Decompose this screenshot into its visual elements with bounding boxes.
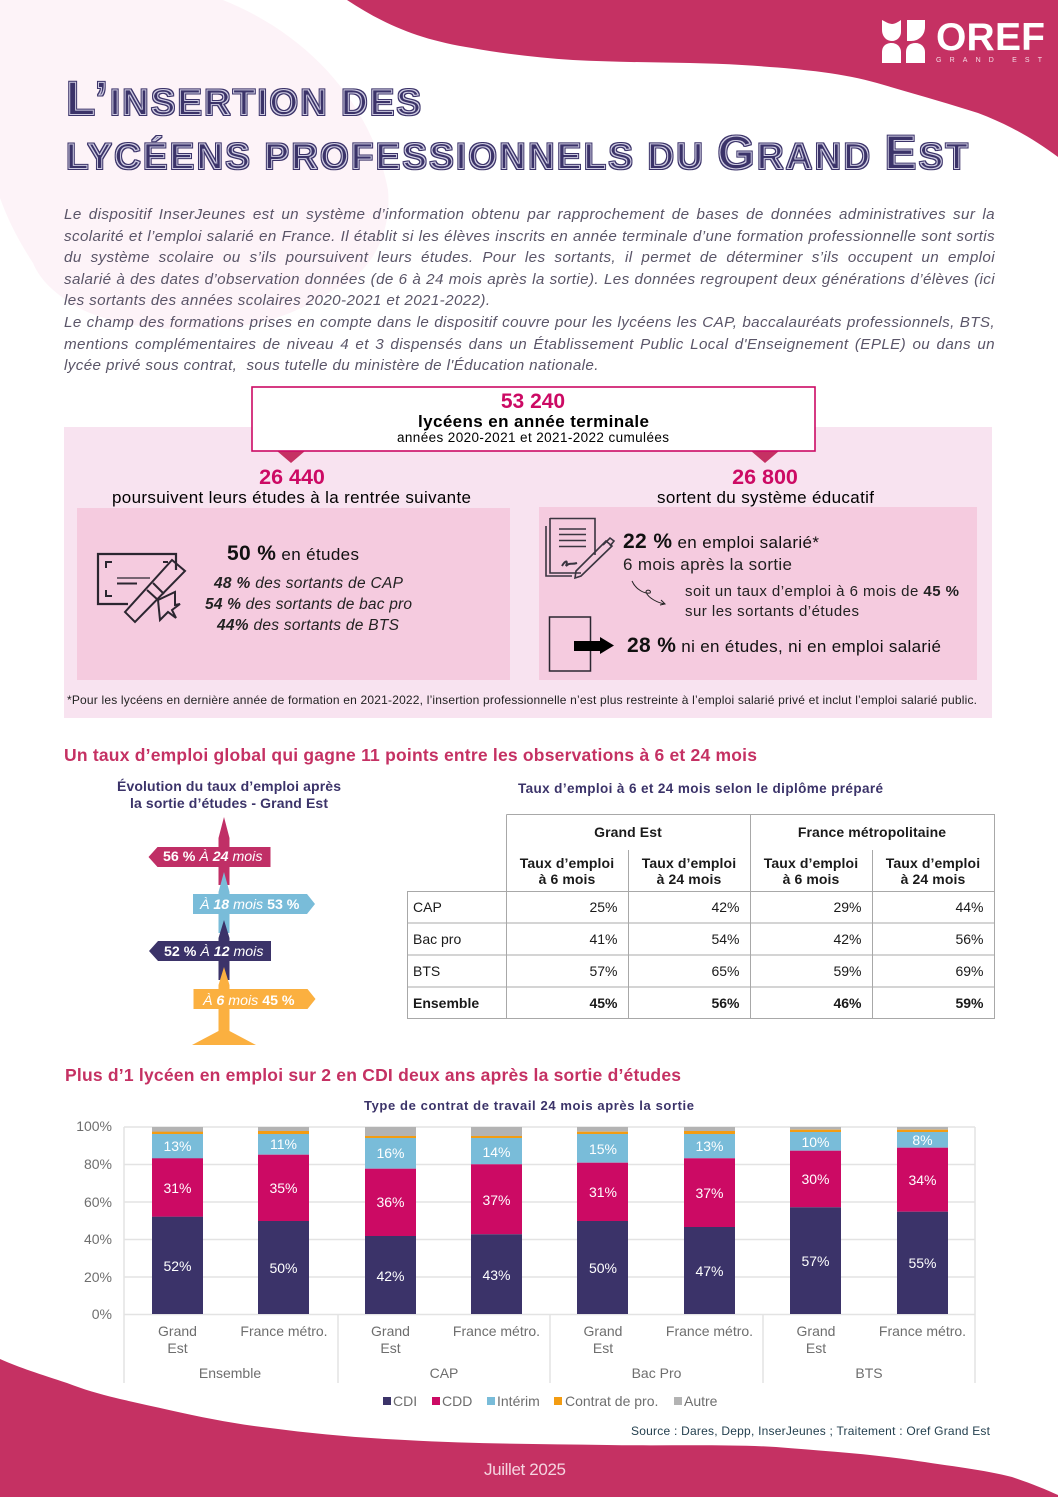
title: LYCÉENS PROFESSIONNELS DU GRAND EST: [66, 127, 968, 180]
bars: BTS Grand Est: [790, 1127, 841, 1314]
y axis labels: 100%: [76, 1118, 112, 1134]
table header: Taux d’emploi: [764, 855, 858, 871]
source note: Source : Dares, Depp, InserJeunes ; Traitement : Oref Grand Est: [631, 1424, 991, 1438]
table header: à 6 mois: [783, 871, 840, 887]
bars: CAP France: 14%: [482, 1144, 511, 1160]
bars: CAP Grand Est: 42%: [376, 1268, 405, 1284]
panel: population breakdown: [64, 387, 992, 718]
sign: 18 months: [193, 872, 315, 933]
x axis labels: Est: [593, 1340, 613, 1356]
panel: leavers: [539, 507, 977, 680]
footnote: *Pour les lycéens en dernière année de formation en 2021-2022, l’insertion professionnelle n’est plus restreinte à l’emploi salarié privé et inclut l’emploi salarié public.: [67, 693, 977, 707]
bars: BTS France: 55%: [908, 1255, 937, 1271]
bars: CAP Grand Est: 36%: [376, 1194, 405, 1210]
table header: à 6 mois: [539, 871, 596, 887]
intro text block: Le champ des formations prises en compte dans le dispositif couvre pour les lycéens les CAP, baccalauréats professionnels, BTS,: [64, 314, 995, 331]
x axis labels: [158, 1323, 966, 1381]
panel: studies: [77, 508, 510, 680]
table header: Taux d’emploi: [520, 855, 614, 871]
y axis labels: 40%: [84, 1231, 112, 1247]
table rows: BTS: [413, 963, 440, 979]
text: six months after: 6 mois après la sortie: [623, 555, 792, 574]
table rows: 44%: [955, 899, 984, 915]
x axis labels: BTS: [855, 1365, 883, 1381]
table rows: 42%: [833, 931, 862, 947]
intro text block: Le dispositif InserJeunes est un système d’information obtenu par rapprochement de bases de données administratives sur la: [64, 206, 995, 223]
y axis labels: 60%: [84, 1194, 112, 1210]
icon: diploma: [98, 554, 185, 622]
bars: Bac Pro Grand Est: [577, 1127, 628, 1314]
table header: [520, 824, 980, 887]
sign: 24 months: 56 % À 24 mois: [163, 848, 262, 865]
bars: CAP France: 43%: [482, 1267, 511, 1283]
sign: 6 months: [192, 967, 316, 1045]
table rows: 69%: [955, 963, 984, 979]
table rows: 45%: [589, 995, 618, 1011]
bars: Bac Pro Grand Est: 15%: [589, 1141, 617, 1157]
y axis labels: [76, 1118, 112, 1322]
icon: logo petals: [882, 20, 925, 63]
table header: à 24 mois: [901, 871, 965, 887]
connector triangle right: [751, 451, 779, 463]
sign: 12 months: [149, 920, 271, 980]
legend: Intérim: [497, 1393, 540, 1409]
stat: 50 % in studies: 50 % en études: [227, 542, 359, 565]
table rows: 46%: [833, 995, 862, 1011]
intro text block: les sortants des années scolaires 2020-2021 et 2021-2022).: [64, 292, 490, 309]
intro text block: mentions complémentaires de niveau 4 et 3 dispensés dans un Établissement Public Local d'Enseignement (EPLE) ou dans un: [64, 336, 995, 353]
chart gridlines and axes: [124, 1127, 975, 1383]
x axis labels: Est: [806, 1340, 826, 1356]
left heading: continuing studies: poursuivent leurs études à la rentrée suivante: [112, 488, 471, 507]
stat: 22 % employed: 22 % en emploi salarié*: [623, 530, 819, 553]
table header: France métropolitaine: [798, 824, 946, 840]
signpost chart: employment rate over time: [117, 778, 341, 1045]
text: employment rate note: sur les sortants d’études: [685, 603, 859, 620]
bars: Ensemble France: 50%: [269, 1260, 298, 1276]
table rows: 59%: [833, 963, 862, 979]
bars: Ensemble Grand Est: 13%: [163, 1138, 192, 1154]
table rows: Bac pro: [413, 931, 461, 947]
legend: Autre: [684, 1393, 718, 1409]
background shape: bottom magenta wave: [0, 1359, 1058, 1497]
bars: Bac Pro France: 37%: [695, 1185, 724, 1201]
x axis labels: Grand: [371, 1323, 410, 1339]
icon: exit arrow: [550, 617, 614, 671]
table rows: 56%: [955, 931, 984, 947]
total box: 53 240: [501, 390, 565, 413]
x axis labels: Est: [167, 1340, 188, 1356]
text: employment rate note: soit un taux d’emploi à 6 mois de 45 %: [685, 583, 959, 600]
intro text block: salarié à des dates d’observation données (de 6 à 24 mois après la sortie). Les données regroupent deux générations d’élèves (ici: [64, 271, 995, 288]
chart title: [117, 778, 341, 811]
bars: Ensemble France: 35%: [269, 1180, 298, 1196]
x axis labels: Bac Pro: [632, 1365, 682, 1381]
stat: by diploma: 54 % des sortants de bac pro: [205, 596, 412, 613]
bars: CAP Grand Est: [365, 1127, 416, 1314]
intro text block: [64, 206, 995, 374]
connector triangle left: [277, 451, 305, 463]
sign: 24 months: [148, 817, 270, 885]
background blob: pale pink top left: [0, 0, 388, 329]
stacked bar chart: contract types: [76, 1098, 975, 1409]
table rows: 29%: [833, 899, 862, 915]
bars: BTS France: [897, 1127, 948, 1314]
bars: CAP France: [471, 1127, 522, 1314]
bars: Bac Pro France: [684, 1127, 735, 1314]
logo wordmark: OREF: [936, 16, 1045, 59]
table rows: [413, 899, 984, 1011]
legend: CDD: [442, 1393, 472, 1409]
stat: 28 % neither: 28 % ni en études, ni en emploi salarié: [627, 634, 941, 657]
icon: curly arrow: [632, 581, 665, 605]
x axis labels: France métro.: [879, 1323, 966, 1339]
y axis labels: 80%: [84, 1156, 112, 1172]
title: L’INSERTION DES: [66, 73, 421, 126]
bars: Bac Pro France: 13%: [695, 1138, 724, 1154]
x axis labels: Grand: [584, 1323, 622, 1339]
table header: Grand Est: [594, 824, 662, 840]
total box: lycéens en année terminale: [418, 412, 649, 431]
logo tagline: GRAND EST: [936, 57, 1043, 64]
left heading: continuing studies: [112, 465, 471, 507]
bars: Bac Pro France: 47%: [695, 1263, 724, 1279]
table rows: 54%: [711, 931, 740, 947]
table rows: Ensemble: [413, 995, 479, 1011]
panel background: [64, 427, 992, 718]
x axis labels: Ensemble: [199, 1365, 261, 1381]
right heading: leaving education: 26 800: [732, 465, 798, 489]
chart title: Évolution du taux d’emploi après: [117, 778, 341, 794]
heading: section contracts: Plus d’1 lycéen en emploi sur 2 en CDI deux ans après la sortie d’études: [65, 1065, 681, 1085]
table header: Taux d’emploi: [886, 855, 980, 871]
x axis labels: France métro.: [666, 1323, 753, 1339]
bars: Ensemble Grand Est: [152, 1127, 203, 1314]
y axis labels: 20%: [84, 1269, 112, 1285]
table rows: 41%: [589, 931, 618, 947]
table title: Taux d’emploi à 6 et 24 mois selon le diplôme préparé: [518, 781, 883, 796]
x axis labels: France métro.: [240, 1323, 328, 1339]
x axis labels: Grand: [158, 1323, 197, 1339]
bars: Ensemble France: 11%: [270, 1136, 297, 1152]
x axis labels: Est: [380, 1340, 401, 1356]
chart title: Type de contrat de travail 24 mois après la sortie: [364, 1098, 694, 1113]
heading: section employment rate: Un taux d’emploi global qui gagne 11 points entre les observations à 6 et 24 mois: [64, 745, 757, 765]
bars: CAP Grand Est: 16%: [376, 1145, 405, 1161]
table rows: 42%: [711, 899, 740, 915]
right heading: leaving education: [657, 465, 874, 507]
intro text block: scolarité et l’emploi salarié en France. Il établit si les élèves inscrits en année terminale d’une formation professionnelle sont sortis: [64, 228, 995, 245]
text: employment rate note: [685, 583, 959, 620]
sign: 12 months: 52 % À 12 mois: [164, 943, 263, 960]
y axis labels: 0%: [92, 1306, 112, 1322]
stat: by diploma: 44% des sortants de BTS: [216, 617, 400, 634]
sign: 18 months: À 18 mois 53 %: [199, 896, 300, 913]
legend: [383, 1393, 718, 1409]
table grid: [408, 814, 994, 1018]
bars: Ensemble France: [258, 1127, 309, 1314]
bars: CAP France: 37%: [482, 1192, 511, 1208]
bars: BTS Grand Est: 10%: [801, 1134, 830, 1150]
bars: Bac Pro Grand Est: 31%: [589, 1184, 617, 1200]
bars: Bac Pro Grand Est: 50%: [589, 1260, 617, 1276]
x axis labels: CAP: [430, 1365, 458, 1381]
total box: années 2020-2021 et 2021-2022 cumulées: [397, 430, 669, 445]
table rows: 56%: [711, 995, 740, 1011]
background shape: top right magenta wave: [347, 0, 1058, 157]
bars: BTS Grand Est: 30%: [801, 1171, 830, 1187]
x axis labels: France métro.: [453, 1323, 540, 1339]
sign: 6 months: À 6 mois 45 %: [202, 992, 295, 1009]
table rows: 59%: [955, 995, 984, 1011]
bars: Ensemble Grand Est: 52%: [163, 1258, 192, 1274]
table header: à 24 mois: [657, 871, 721, 887]
logo: OREF Grand Est: [882, 16, 1045, 64]
table rows: 25%: [589, 899, 618, 915]
table rows: 57%: [589, 963, 618, 979]
legend: Contrat de pro.: [565, 1393, 658, 1409]
icon: signed contract: [546, 518, 614, 578]
x axis labels: Grand: [797, 1323, 835, 1339]
table rows: 65%: [711, 963, 740, 979]
date: Juillet 2025: [484, 1460, 566, 1479]
table: employment rate by diploma: [408, 781, 994, 1018]
chart title: la sortie d’études - Grand Est: [130, 795, 328, 811]
bars: Ensemble Grand Est: 31%: [163, 1180, 192, 1196]
table rows: CAP: [413, 899, 442, 915]
left heading: continuing studies: 26 440: [259, 465, 325, 489]
title: [66, 73, 968, 180]
table header: Taux d’emploi: [642, 855, 736, 871]
stat: by diploma: [205, 575, 412, 634]
bars: BTS France: 34%: [908, 1172, 937, 1188]
total box: [252, 387, 815, 451]
intro text block: du système scolaire ou s’ils poursuivent leurs études. Pour les sortants, il permet de déterminer s’ils occupent un emploi: [64, 249, 995, 266]
bars: BTS Grand Est: 57%: [801, 1253, 830, 1269]
bars: BTS France: 8%: [912, 1132, 933, 1148]
stat: by diploma: 48 % des sortants de CAP: [213, 575, 404, 592]
right heading: leaving education: sortent du système éducatif: [657, 488, 874, 507]
legend: CDI: [393, 1393, 417, 1409]
intro text block: lycée privé sous contrat, sous tutelle du ministère de l'Éducation nationale.: [64, 357, 599, 374]
